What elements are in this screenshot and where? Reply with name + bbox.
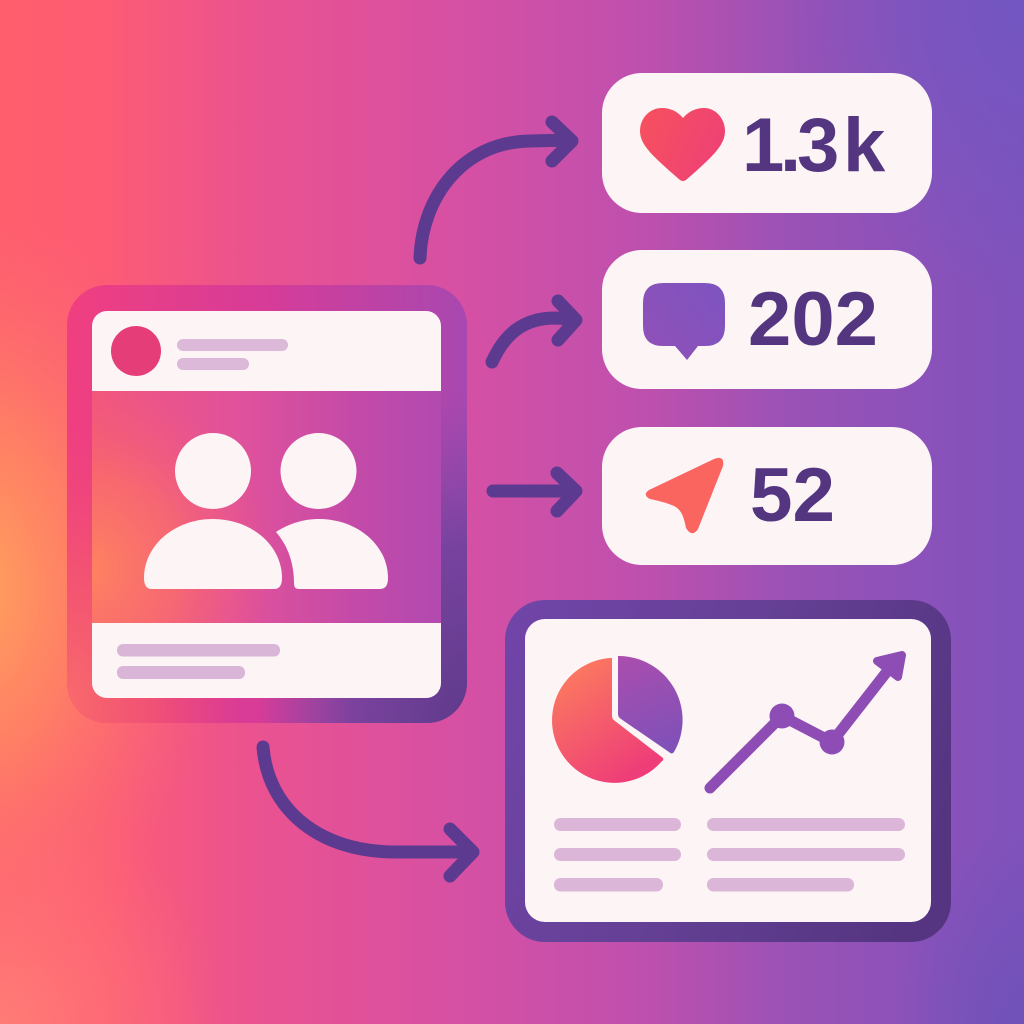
- post footer: [92, 623, 441, 698]
- comments count: 202: [748, 277, 878, 362]
- icon: heart: [640, 108, 725, 181]
- panel: shares: [602, 427, 932, 565]
- arrow: post to shares: [493, 473, 576, 511]
- panel: social media post: [67, 285, 467, 723]
- shares count: 52: [750, 453, 835, 538]
- panel: likes: [602, 73, 932, 213]
- line chart: [710, 655, 902, 788]
- icon: speech bubble: [643, 283, 725, 360]
- panel: comments: [602, 250, 932, 389]
- likes count: 1.3k: [742, 103, 886, 188]
- icon: two people: [144, 433, 388, 589]
- arrow: post to likes: [420, 122, 572, 258]
- arrow: post to comments: [492, 301, 576, 362]
- pie chart: [552, 656, 683, 783]
- panel: analytics dashboard: [505, 600, 951, 942]
- summary text lines: [554, 818, 905, 892]
- arrow: post to analytics: [263, 747, 473, 876]
- icon: paper plane: [646, 458, 723, 533]
- post header: [92, 311, 441, 391]
